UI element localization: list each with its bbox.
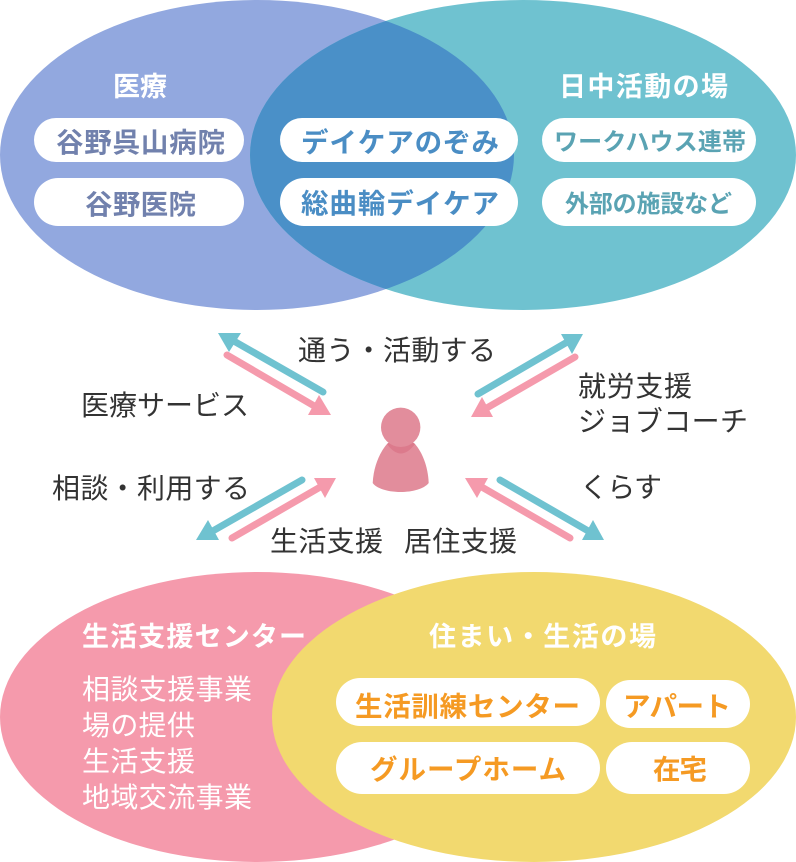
list: life support services: 生活支援 <box>82 746 195 777</box>
arrow: top left teal <box>218 333 323 392</box>
icon: person <box>373 408 429 492</box>
pill: external facilities <box>542 178 756 226</box>
pill: Sogawa day care <box>280 178 518 226</box>
pill: work house renkei: ワークハウス連帯 <box>554 129 746 156</box>
arrow: bottom left teal <box>196 480 302 540</box>
pill: life training center: 生活訓練センター <box>355 691 580 722</box>
heading: housing: 住まい・生活の場 <box>429 622 656 652</box>
arrow: bottom right pink <box>465 478 570 538</box>
circle: housing <box>272 572 796 862</box>
pill: at home: 在宅 <box>653 754 707 785</box>
label: employment support and job coach: 就労支援 <box>578 371 692 402</box>
pill: Sogawa day care: 総曲輪デイケア <box>301 188 499 219</box>
heading: life support center: 生活支援センター <box>82 622 306 652</box>
label: life support: 生活支援 <box>270 526 383 557</box>
pill: apartment <box>606 680 750 728</box>
pill: Tanino clinic: 谷野医院 <box>85 189 196 220</box>
pill: group home <box>336 742 600 794</box>
label: live: くらす <box>580 472 662 503</box>
pill: group home: グループホーム <box>370 754 566 785</box>
label: consult and use: 相談・利用する <box>52 473 250 504</box>
panel: medical and daytime activity venn <box>0 0 796 310</box>
pill: life training center <box>336 678 600 726</box>
circle overlap: day care <box>250 21 514 289</box>
list: life support services: 場の提供 <box>82 710 195 741</box>
pill: Tanino Kureyama hospital: 谷野呉山病院 <box>56 127 225 158</box>
label: employment support and job coach <box>578 371 748 437</box>
arrow: top right teal <box>478 334 583 394</box>
label: employment support and job coach: ジョブコーチ <box>578 406 748 437</box>
pill: Day care Nozomi: デイケアのぞみ <box>301 127 499 158</box>
pill: apartment: アパート <box>623 691 731 722</box>
arrow: bottom right teal <box>500 480 604 540</box>
arrow: top left pink <box>227 355 331 415</box>
arrow: bottom left pink <box>232 478 336 538</box>
list: life support services <box>82 674 252 813</box>
circle: medical <box>0 0 514 310</box>
label: residential support: 居住支援 <box>404 526 517 557</box>
arrow: top right pink <box>471 357 575 417</box>
pill: Tanino clinic <box>34 178 244 226</box>
circle: daytime activity <box>250 0 796 310</box>
pill: external facilities: 外部の施設など <box>565 191 732 218</box>
label: commute and activity: 通う・活動する <box>298 335 496 366</box>
pill: Day care Nozomi <box>280 118 518 162</box>
pill: work house renkei <box>542 118 756 162</box>
list: life support services: 相談支援事業 <box>82 674 252 705</box>
panel: life support and housing venn <box>0 572 796 862</box>
pill: Tanino Kureyama hospital <box>34 118 244 162</box>
label: medical service: 医療サービス <box>81 390 249 421</box>
list: life support services: 地域交流事業 <box>82 782 252 813</box>
heading: daytime activity: 日中活動の場 <box>559 72 728 102</box>
circle: life support center <box>0 572 514 862</box>
pill: at home <box>606 742 750 794</box>
heading: medical: 医療 <box>113 72 167 102</box>
